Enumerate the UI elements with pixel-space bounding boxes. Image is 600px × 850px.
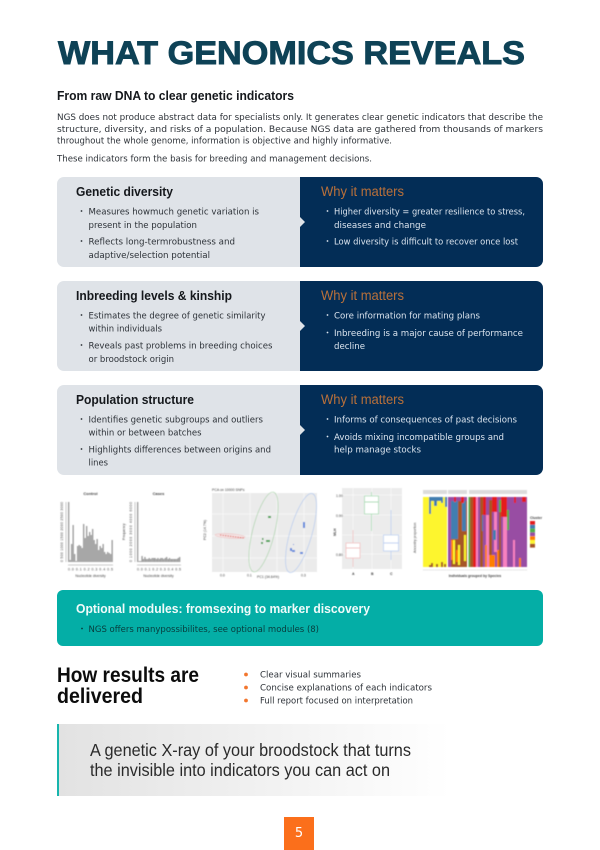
text: inbreeding bullets: within individuals — [88, 324, 162, 334]
text: why inbreeding matters: Core information for mating plans — [334, 310, 480, 322]
list: delivery items: Concise explanations of each indicators — [260, 682, 432, 694]
chart: box plot: B — [371, 572, 374, 576]
heading: why it matters: Why it matters — [321, 184, 404, 199]
text: population bullets: Identifies genetic subgroups and outliers — [88, 414, 263, 426]
chart: box plot: C — [390, 572, 393, 576]
text: population bullets: within or between batches — [88, 428, 202, 438]
text: why structure matters — [327, 414, 517, 456]
text: why diversity matters: diseases and change — [334, 220, 426, 231]
panel: genetic diversity — [57, 177, 543, 267]
chart: PCA scatter: PCA on 10000 SNPs — [212, 488, 245, 492]
chart: control histogram: 0 500 1000 1500 2000 2500 3000 — [60, 502, 64, 562]
list: delivery items — [244, 670, 432, 706]
chart: cases histogram: 0 1000 2000 3000 4000 6000 — [129, 502, 133, 562]
intro paragraph: throughout the whole genome, information is objective and highly informative. — [57, 136, 392, 146]
intro paragraph: NGS does not produce abstract data for specialists only. It generates clear genetic indicators that describe the — [57, 112, 543, 123]
chart: cases histogram: Nucleotide diversity — [143, 574, 174, 578]
text: why structure matters: Avoids mixing incompatible groups and — [334, 432, 504, 443]
chart: stacked admixture bars: Ancestry proportion — [413, 523, 417, 553]
text: diversity bullets: present in the population — [88, 220, 197, 231]
chart: stacked admixture bars: Cluster — [530, 516, 543, 520]
chart: control histogram: 0.0 0.1 0.2 0.3 0.4 0.5 — [68, 568, 113, 572]
chart: PCA scatter: PC1 (34.64%) — [257, 575, 279, 579]
text: why structure matters: Informs of consequences of past decisions — [334, 414, 517, 426]
subheading: From raw DNA to clear genetic indicators — [57, 88, 294, 103]
chart: cases histogram: Cases — [153, 491, 165, 496]
chart: stacked admixture bars — [413, 490, 543, 578]
heading: genetic diversity: Genetic diversity — [76, 184, 174, 199]
list: delivery items: Full report focused on interpretation — [260, 696, 413, 706]
text: why inbreeding matters: decline — [334, 341, 365, 352]
chart: cases histogram — [122, 491, 181, 578]
chart: box plot: MLH — [333, 528, 337, 536]
chart: cases histogram: Frequency — [122, 523, 126, 540]
heading: why it matters: Why it matters — [321, 392, 404, 407]
text: optional modules bullet: NGS offers manypossibilites, see optional modules (8) — [88, 624, 319, 635]
heading: optional modules: Optional modules: fromsexing to marker discovery — [76, 601, 371, 616]
text: inbreeding bullets: Estimates the degree of genetic similarity — [88, 310, 266, 322]
chart: PCA scatter: PC2 (14.7%) — [203, 520, 207, 540]
heading: how results are delivered: delivered — [57, 684, 143, 708]
panel: inbreeding levels and kinship — [57, 281, 543, 371]
chart: PCA scatter: 0.3 — [301, 574, 306, 578]
text: why structure matters: help manage stocks — [334, 444, 421, 456]
callout: genetic x-ray — [57, 724, 450, 796]
text: population bullets: lines — [88, 458, 108, 468]
title: WHAT GENOMICS REVEALS — [58, 35, 525, 71]
text: population bullets — [81, 414, 271, 468]
heading: inbreeding: Inbreeding levels & kinship — [76, 288, 232, 303]
text: why diversity matters — [327, 206, 525, 248]
heading: why it matters: Why it matters — [321, 288, 404, 303]
callout: genetic x-ray: A genetic X-ray of your broodstock that turns — [90, 740, 411, 760]
intro paragraph — [56, 112, 543, 164]
chart: cases histogram: 0.0 0.1 0.2 0.3 0.4 0.5 — [137, 568, 181, 572]
chart: PCA scatter — [203, 488, 323, 579]
text: diversity bullets: adaptive/selection potential — [88, 250, 210, 261]
chart: control histogram: Control — [83, 491, 98, 496]
page number: 5 — [295, 826, 303, 841]
list: delivery items: Clear visual summaries — [260, 670, 361, 680]
text: why inbreeding matters — [327, 310, 523, 352]
chart: control histogram — [60, 491, 113, 578]
text: inbreeding bullets: or broodstock origin — [88, 354, 174, 365]
chart: stacked admixture bars: Individuals grouped by Species — [449, 574, 501, 578]
text: diversity bullets: Reflects long-termrobustness and — [88, 236, 235, 248]
callout: genetic x-ray: the invisible into indicators you can act on — [90, 760, 390, 780]
panel: population structure — [57, 385, 543, 475]
intro paragraph: structure, diversity, and risks of a population. Because NGS data are gathered from thousands of markers — [57, 124, 543, 135]
text: diversity bullets: Measures howmuch genetic variation is — [88, 206, 259, 218]
text: why diversity matters: Low diversity is difficult to recover once lost — [334, 236, 518, 248]
chart: box plot: 1.00 — [336, 494, 343, 498]
heading: how results are delivered: How results are — [57, 663, 199, 687]
chart: control histogram: Nucleotide diversity — [75, 574, 106, 578]
panel: optional modules — [57, 590, 543, 646]
heading: how results are delivered — [57, 663, 199, 708]
chart: box plot — [333, 488, 402, 576]
intro paragraph: These indicators form the basis for breeding and management decisions. — [56, 154, 372, 164]
text: diversity bullets — [81, 206, 259, 261]
text: why diversity matters: Higher diversity = greater resilience to stress, — [334, 206, 525, 218]
chart: box plot: 0.80 — [336, 553, 343, 557]
chart: box plot: 0.90 — [336, 514, 343, 518]
heading: population structure: Population structure — [76, 392, 194, 407]
text: population bullets: Highlights differences between origins and — [88, 444, 271, 456]
text: inbreeding bullets: Reveals past problems in breeding choices — [88, 340, 273, 352]
text: inbreeding bullets — [81, 310, 273, 365]
page number — [284, 817, 314, 850]
chart: box plot: A — [352, 572, 355, 576]
chart: PCA scatter: 0.0 — [220, 574, 225, 578]
text: why inbreeding matters: Inbreeding is a major cause of performance — [334, 328, 523, 339]
chart: PCA scatter: 0.1 — [247, 574, 252, 578]
